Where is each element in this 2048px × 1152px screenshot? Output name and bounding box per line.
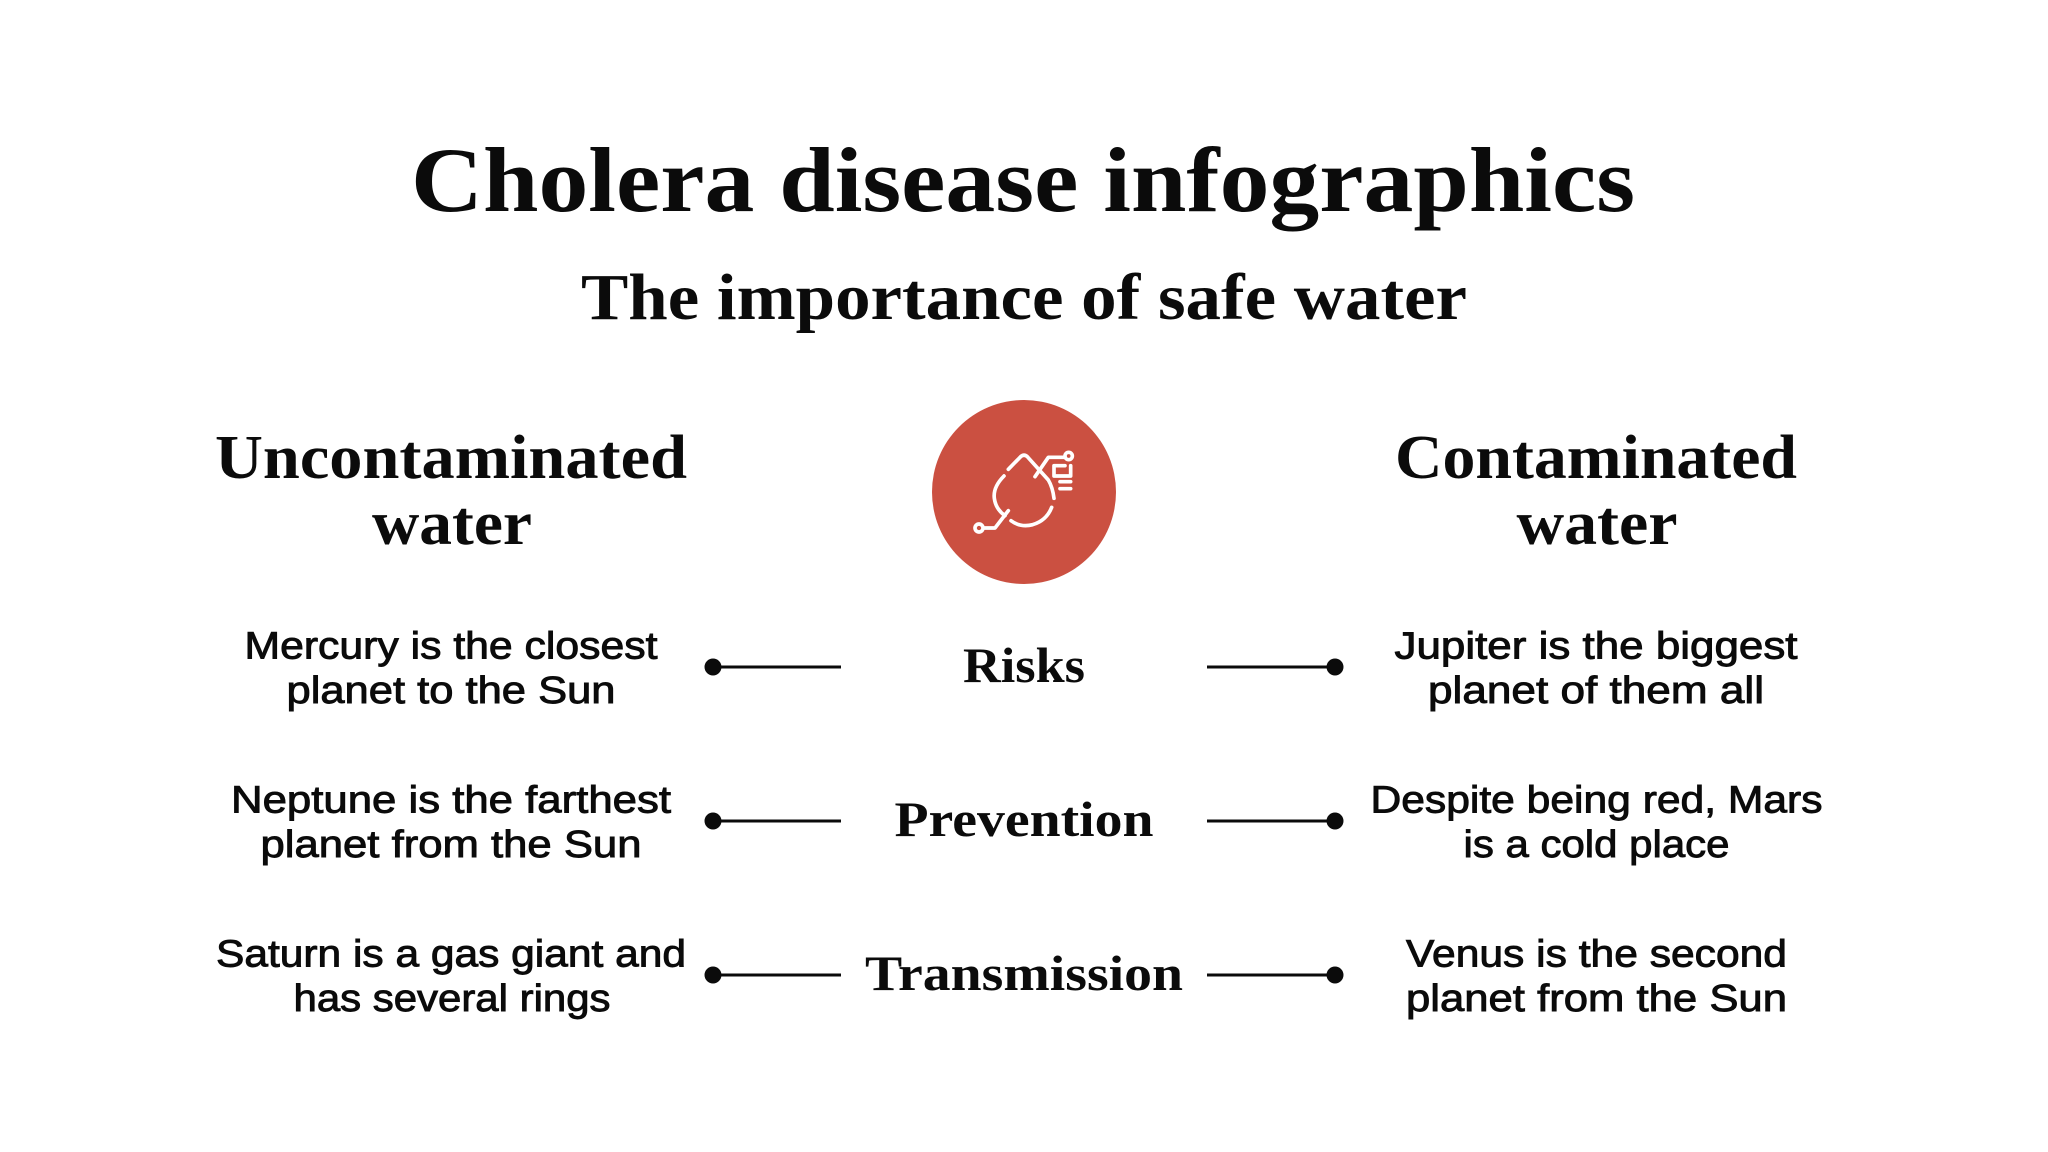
title: Cholera disease infographics: [411, 129, 1635, 231]
text: venus: [1406, 934, 1787, 1020]
connector: left: [704, 812, 841, 830]
row 2: prevention: [231, 780, 1822, 866]
icon: water drop in red circle: [932, 400, 1116, 584]
text: saturn: has several rings: [294, 978, 610, 1020]
subtitle: The importance of safe water: [581, 261, 1467, 334]
text: saturn: [216, 934, 686, 1020]
connector: left: [704, 658, 841, 676]
heading: uncontaminated water: water: [372, 490, 532, 558]
connector: right: [1207, 812, 1344, 830]
text: jupiter: Jupiter is the biggest: [1394, 626, 1798, 668]
connector: left: [704, 966, 841, 984]
heading: contaminated water: Contaminated: [1395, 424, 1797, 492]
text: neptune: planet from the Sun: [260, 824, 642, 866]
label: risks: Risks: [963, 637, 1085, 693]
row 1: risks: [244, 626, 1798, 712]
row 3: transmission: [216, 934, 1787, 1020]
text: mercury: [244, 626, 658, 712]
heading: uncontaminated water: Uncontaminated: [215, 424, 687, 492]
heading: uncontaminated water: [215, 424, 687, 558]
text: mars: is a cold place: [1464, 824, 1730, 866]
connector: right: [1207, 966, 1344, 984]
text: venus: Venus is the second: [1406, 934, 1787, 976]
text: mercury: Mercury is the closest: [244, 626, 658, 668]
text: saturn: Saturn is a gas giant and: [216, 934, 686, 976]
text: jupiter: planet of them all: [1428, 670, 1764, 712]
text: mars: Despite being red, Mars: [1370, 780, 1822, 822]
heading: contaminated water: water: [1516, 490, 1678, 558]
text: jupiter: [1394, 626, 1798, 712]
connector: right: [1207, 658, 1344, 676]
label: transmission: Transmission: [865, 945, 1183, 1001]
heading: contaminated water: [1395, 424, 1797, 558]
text: neptune: [231, 780, 672, 866]
text: mercury: planet to the Sun: [286, 670, 616, 712]
text: mars: [1370, 780, 1822, 866]
text: venus: planet from the Sun: [1406, 978, 1787, 1020]
label: prevention: Prevention: [894, 791, 1154, 847]
text: neptune: Neptune is the farthest: [231, 780, 672, 822]
